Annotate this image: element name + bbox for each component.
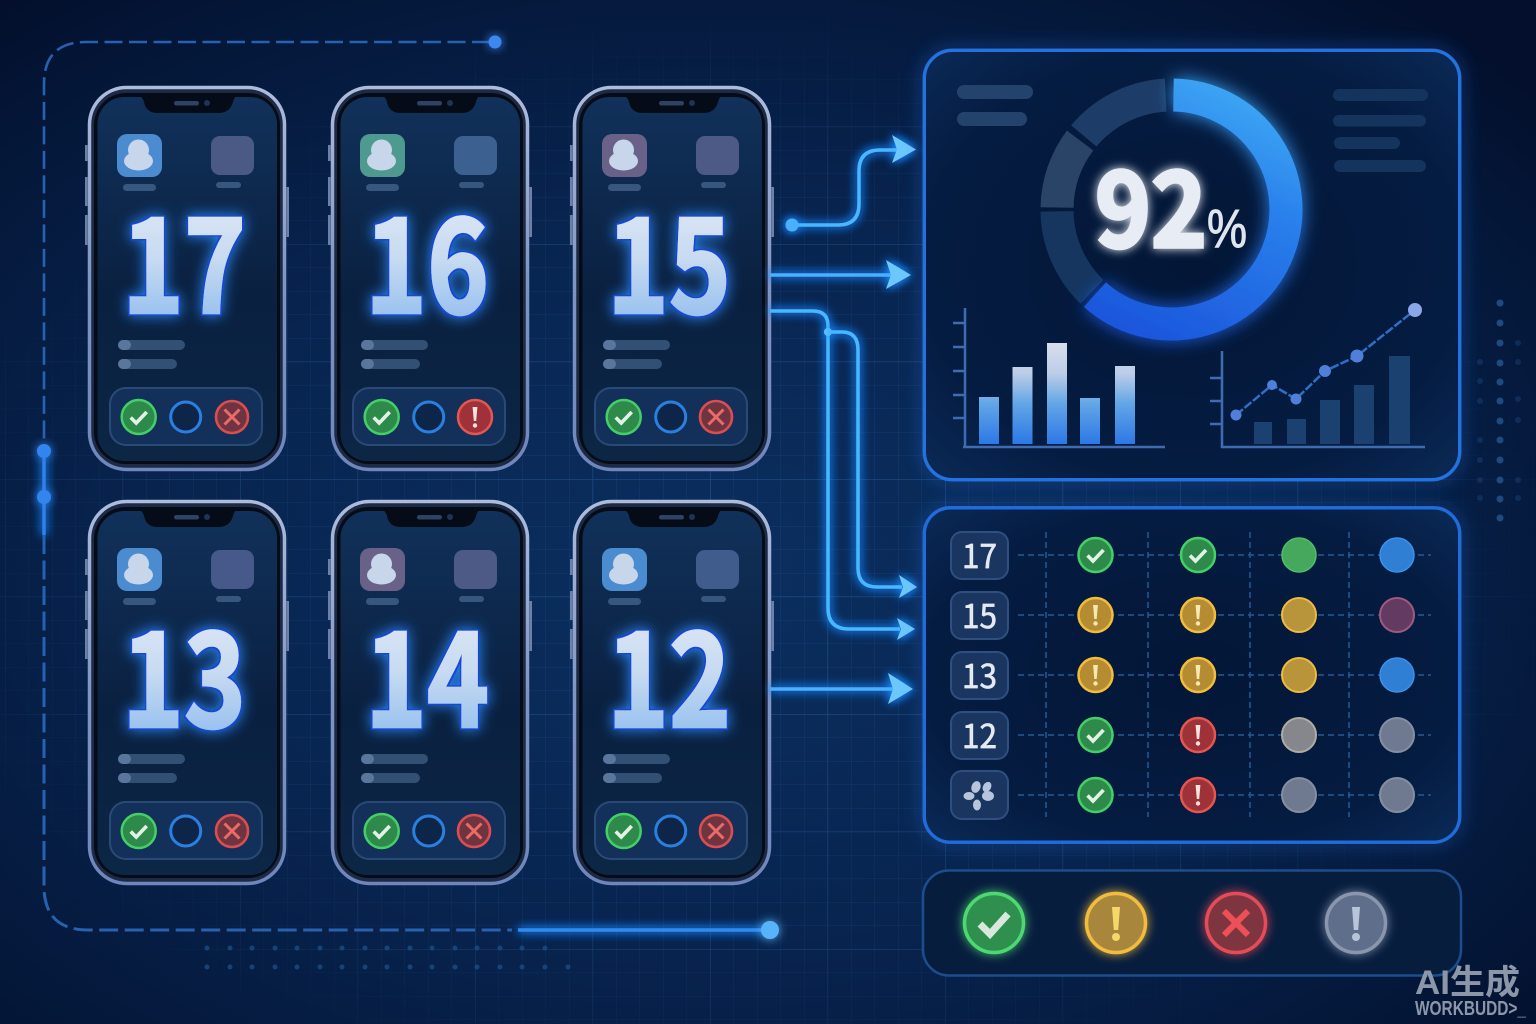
watermark [1415,964,1527,1020]
legend icon: warning [1086,894,1146,952]
table row 13 [951,650,1414,699]
status icons [607,814,732,848]
version number 15: 15 [607,165,731,350]
arrow: straight to dashboard [770,260,911,289]
percent sign: % [1207,199,1247,259]
table row 15 [951,590,1414,639]
version number 12: 12 [607,579,731,764]
icon: app blue-grey [454,136,497,175]
phone 16 [328,88,532,470]
header placeholder lines [957,85,1033,126]
phone 13 [85,502,289,884]
icon: app grey [696,136,739,175]
version number 14: 14 [365,579,489,764]
donut chart 92% [1010,48,1333,371]
status icons [122,400,248,434]
arrow: straight to table [770,673,913,704]
status icons [365,814,490,848]
dot matrix: right [1477,300,1521,522]
version number 16: 16 [365,165,489,350]
status icons [122,814,248,848]
status icons [365,400,492,434]
phone 17 [85,88,289,470]
status icons [607,400,732,434]
legend icon: pass [964,894,1024,952]
table row 17: 17 [962,530,997,578]
legend icon: fail [1206,894,1266,952]
legend icon: unknown [1326,894,1386,952]
icon: app teal [360,134,405,177]
icon: app blue [117,548,162,591]
dot matrix: bottom [204,946,570,970]
phone 15 [570,88,774,470]
arrows: phones to panels [770,135,917,704]
table row 15: 15 [962,590,997,638]
arrow: curved to dashboard upper [786,135,916,232]
table row 12 [951,710,1414,759]
phone 12 [570,502,774,884]
icon: app blue-grey [696,550,739,589]
icon: app grey [211,136,254,175]
icon: app blue [602,548,647,591]
arrow: long route to table row 15 [770,311,915,640]
left dashed connector [37,36,779,939]
table row 12: 12 [962,710,997,758]
icon: app grey [454,550,497,589]
panel: legend [923,870,1461,976]
value: 92: 92 [1095,130,1207,277]
bar chart [953,308,1165,447]
version number 13: 13 [122,579,246,764]
combo line chart [1210,303,1425,448]
icon: app purple [602,134,647,177]
watermark: AI生成 [1415,964,1520,1002]
version number 17: 17 [122,165,246,350]
phone 14 [328,502,532,884]
table row: flower icon [951,771,1414,819]
icon: app blue [117,134,162,177]
icon: app purple [360,548,405,591]
side placeholder lines [1333,89,1428,172]
table row 17 [951,530,1414,579]
panel: dashboard [924,48,1460,480]
table row 13: 13 [962,650,997,698]
panel: compatibility table [924,508,1460,842]
icon: app grey [211,550,254,589]
arrow: branch to table row 17 [828,332,917,598]
